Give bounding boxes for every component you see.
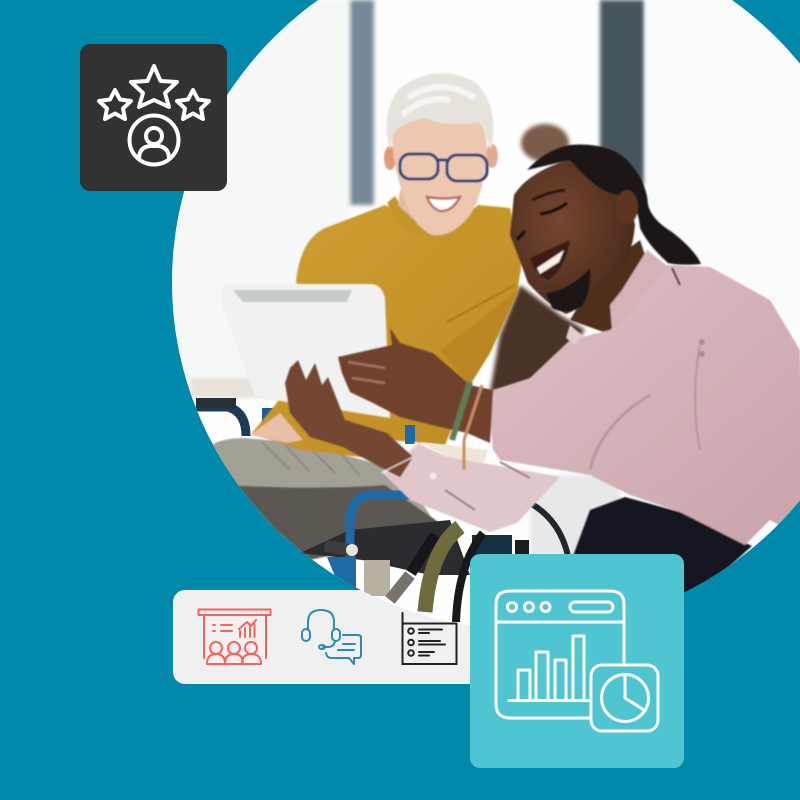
icon: checklist bbox=[402, 613, 456, 664]
neck bbox=[397, 189, 414, 220]
chair back bbox=[196, 407, 246, 436]
woman bbox=[205, 73, 522, 562]
neck bbox=[570, 240, 650, 335]
sweater bbox=[252, 205, 522, 457]
window columns bbox=[172, 0, 800, 560]
photo: two colleagues looking at a tablet bbox=[160, 0, 800, 650]
man bbox=[383, 145, 800, 600]
glasses bbox=[400, 154, 487, 181]
icon: browser window with bar chart and pie bbox=[496, 591, 658, 731]
ear bbox=[616, 190, 638, 224]
background person bbox=[490, 124, 585, 392]
eyes bbox=[517, 203, 567, 240]
head bbox=[510, 158, 635, 314]
analytics icon card bbox=[470, 554, 684, 768]
dark trousers bbox=[573, 497, 752, 600]
collar bbox=[610, 250, 667, 330]
wheelchair bbox=[300, 425, 522, 622]
hands bbox=[250, 328, 493, 477]
hair bbox=[527, 145, 701, 265]
pink shirt bbox=[490, 265, 800, 545]
photo backdrop: bright window bbox=[160, 0, 800, 650]
hair bbox=[387, 73, 493, 150]
icon: three stars and a user bbox=[99, 66, 209, 164]
face bbox=[392, 108, 487, 235]
smile bbox=[427, 197, 460, 211]
goatee bbox=[546, 268, 590, 312]
light icon card bbox=[173, 590, 480, 684]
paper on lap bbox=[420, 442, 488, 463]
lower sleeve bbox=[383, 443, 560, 532]
trousers bbox=[212, 437, 432, 517]
rolled sleeve bbox=[695, 345, 700, 450]
icon card: star ratings bbox=[80, 44, 227, 191]
ears bbox=[384, 146, 396, 170]
wheelchair rear wheel bbox=[530, 503, 568, 556]
icon: presentation with audience bbox=[198, 610, 270, 664]
tablet bbox=[221, 284, 390, 418]
icon: headset with chat bubble bbox=[302, 610, 361, 664]
smile bbox=[530, 240, 570, 280]
